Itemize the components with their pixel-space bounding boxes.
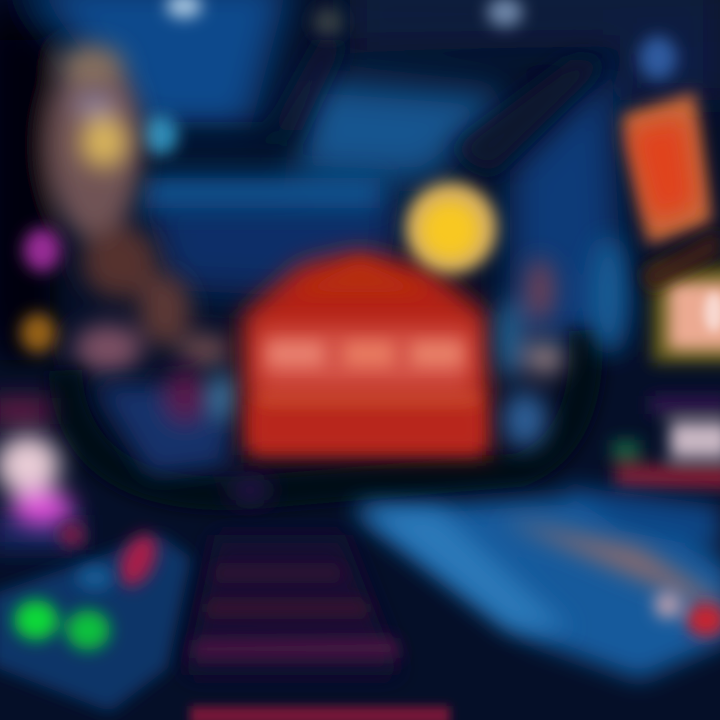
right slot figures [496,237,626,448]
icon: pink button [112,528,164,592]
orange panel top right [622,92,712,245]
icon: glowing coin [405,182,497,274]
upper blue wall [0,0,720,340]
lower-left interior [95,369,272,502]
bright window right [640,228,720,363]
red striped aisle [185,535,450,720]
panel: left lit machine [0,398,85,550]
side lights on left [20,228,61,353]
sign text block [258,328,473,388]
panel: control desk with buttons [0,528,192,712]
dark ceiling beams [145,40,610,208]
ceiling lights [142,0,677,155]
person at left [0,40,231,372]
panel: blue table bottom right [350,485,720,680]
right lower machine [612,396,720,489]
icon: green buttons [14,600,110,650]
curved dark arc [65,330,586,493]
panel: red marquee sign [242,250,490,455]
